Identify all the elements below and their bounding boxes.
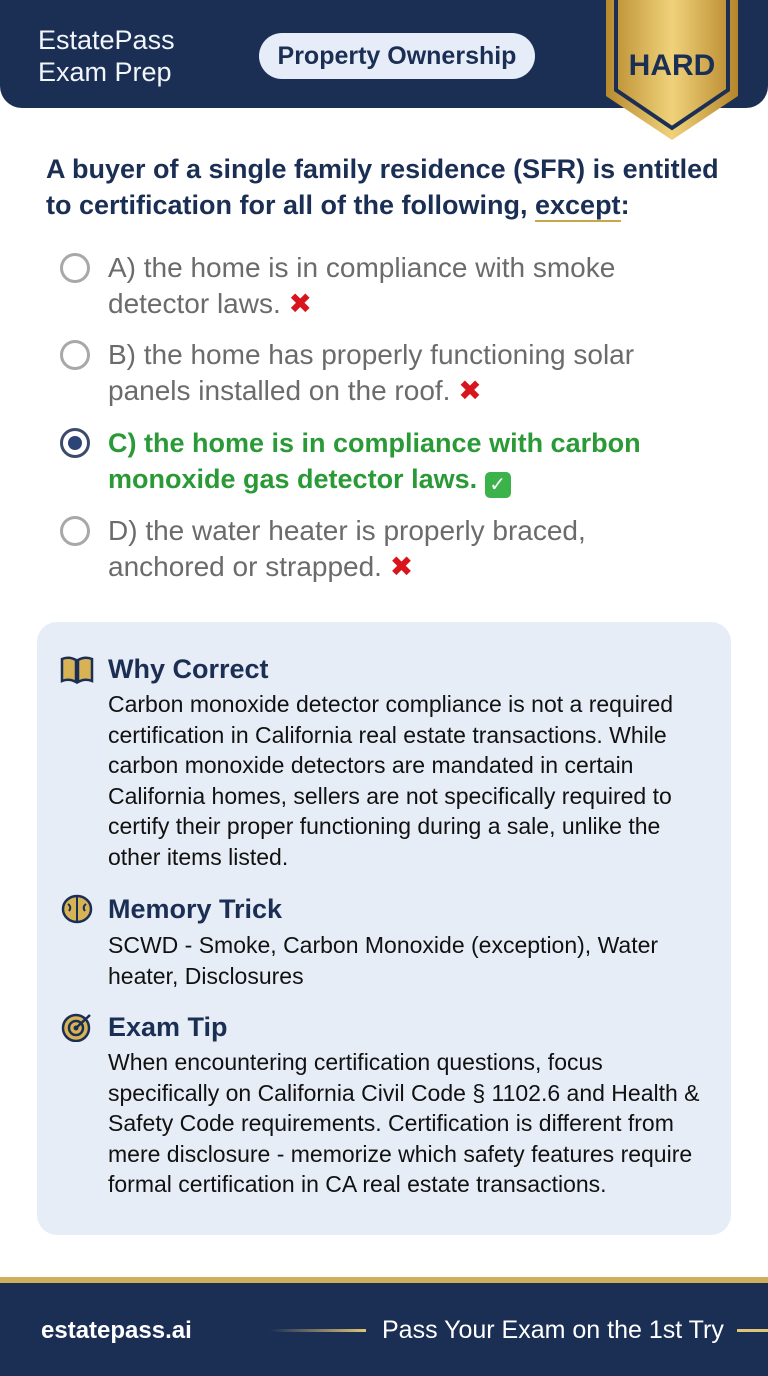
category pill: Property Ownership — [278, 42, 516, 70]
text: exam tip: When encountering certification questions, focus specifically on California Civil Code § 1102.6 and Health & Safety Code requirements. Certification is different from mere disclosure - memorize which safety features require formal certification in CA real estate transactions. — [108, 1049, 700, 1197]
icon: brain — [62, 894, 92, 924]
brand: EstatePass — [38, 25, 175, 55]
badge: HARD — [606, 0, 738, 140]
option C correct: ✓ — [489, 474, 506, 496]
badge: HARD: HARD — [629, 49, 715, 82]
option D: D) the water heater is properly braced, anchored or strapped. ✖ — [108, 515, 586, 582]
question: A buyer of a single family residence (SFR) is entitled to certification for all of the following, except: — [46, 154, 719, 220]
option B: B) the home has properly functioning solar panels installed on the roof. ✖ — [108, 339, 634, 406]
brand — [38, 25, 175, 87]
icon: target — [62, 1014, 91, 1042]
heading: Exam Tip: Exam Tip — [108, 1012, 228, 1042]
icon: book — [60, 656, 94, 684]
footer brand: estatepass.ai — [41, 1317, 192, 1344]
heading: Why Correct: Why Correct — [108, 654, 269, 684]
heading: Memory Trick: Memory Trick — [108, 894, 282, 924]
panel: explanation — [37, 622, 731, 1235]
text: why correct: Carbon monoxide detector compliance is not a required certification in California real estate transactions. While carbon monoxide detectors are mandated in certain California homes, sellers are not specifically required to certify their proper functioning during a sale, unlike the other items listed. — [108, 691, 673, 870]
header bar — [0, 0, 768, 108]
category pill — [259, 33, 535, 79]
decorative line — [270, 1329, 366, 1332]
option A: A) the home is in compliance with smoke detector laws. ✖ — [108, 252, 615, 319]
footer — [0, 1277, 768, 1376]
text: memory trick: SCWD - Smoke, Carbon Monoxide (exception), Water heater, Disclosures — [108, 932, 658, 988]
tagline: Pass Your Exam on the 1st Try — [382, 1316, 724, 1344]
brand: Exam Prep — [38, 57, 172, 87]
option C correct: C) the home is in compliance with carbon monoxide gas detector laws. — [108, 428, 641, 494]
